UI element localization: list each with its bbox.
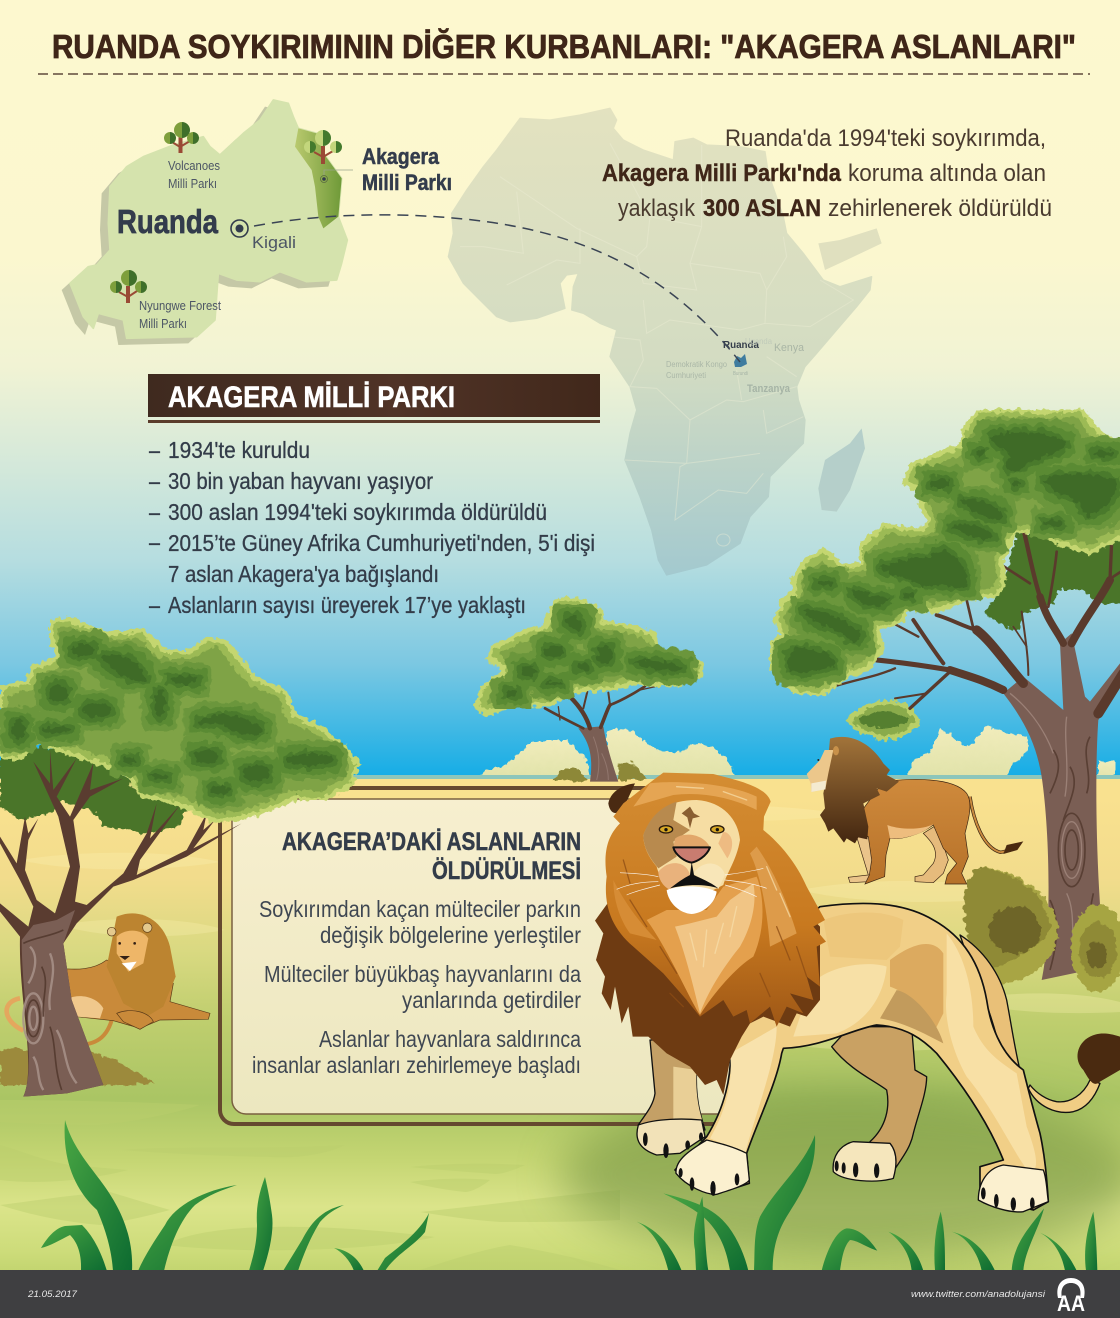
- sky background: [0, 0, 1120, 780]
- left tree trunk and branches: [0, 750, 242, 1097]
- panel body text: [252, 896, 581, 1078]
- panel heading: AKAGERA’DAKİ ASLANLARIN: [282, 828, 581, 856]
- map of Rwanda: Ruanda: [117, 203, 219, 240]
- dark under canopy: [0, 747, 187, 833]
- map of Rwanda: Kigali: [252, 233, 296, 252]
- far front leg: [638, 1040, 705, 1130]
- small bushes by middle tree: [552, 762, 647, 782]
- small foliage patch: [847, 700, 920, 740]
- map of Rwanda: Milli Parkı: [168, 176, 217, 191]
- horizon clouds: [475, 727, 1115, 782]
- chin: [667, 886, 717, 914]
- map of Africa: [448, 108, 882, 575]
- logo: AA: [1057, 1278, 1085, 1316]
- map of Africa labels: Demokratik Kongo: [666, 360, 728, 369]
- map of Africa labels: Uganda: [745, 337, 773, 346]
- park facts list: 7 aslan Akagera'ya bağışlandı: [168, 561, 439, 587]
- body: [675, 903, 1048, 1210]
- whiskers: [617, 868, 767, 897]
- footer bar: www.twitter.com/anadolujansi: [911, 1289, 1046, 1300]
- far hind leg: [832, 1027, 927, 1177]
- orange mane: [605, 773, 826, 1027]
- intro text: [602, 125, 1052, 222]
- map of Africa labels: [666, 337, 805, 395]
- nose: [673, 847, 710, 863]
- nose bridge: [673, 835, 710, 847]
- light mane fur: [647, 877, 762, 1015]
- map of Africa labels: Cumhuriyeti: [666, 371, 706, 380]
- left acacia tree: [0, 617, 360, 1097]
- savanna ground: [0, 775, 1120, 1271]
- main lion foreground: [595, 773, 1120, 1212]
- mouth: [670, 862, 718, 888]
- intro text: yaklaşık: [618, 195, 696, 222]
- park facts list: –: [149, 437, 160, 463]
- info panel: killing of the lions: [220, 788, 745, 1124]
- map of Africa labels: Ruanda: [723, 339, 759, 351]
- big acacia tree right: [770, 408, 1120, 980]
- map of Rwanda: Milli Parkı: [139, 316, 187, 331]
- map of Rwanda: Milli Parkı: [362, 170, 452, 195]
- bushes right: [964, 868, 1120, 992]
- park facts list: [149, 437, 595, 618]
- front paws: [676, 1140, 1048, 1212]
- eyes: [659, 826, 724, 833]
- park facts list: 1934'te kuruldu: [168, 437, 310, 463]
- ground shading streaks: [0, 1100, 620, 1270]
- right tree branches: [832, 532, 1120, 713]
- foreground lion ground shadow: [560, 1090, 1120, 1260]
- panel heading: ÖLDÜRÜLMESİ: [432, 856, 581, 885]
- map of Rwanda: Nyungwe Forest: [139, 298, 221, 313]
- panel heading: [282, 828, 581, 885]
- panel body text: Soykırımdan kaçan mülteciler parkın: [259, 896, 581, 922]
- icon: tree Akagera: [304, 130, 342, 164]
- claws: [643, 1132, 1035, 1211]
- park facts list: –: [149, 529, 160, 555]
- park facts list: 30 bin yaban hayvanı yaşıyor: [168, 468, 433, 494]
- park facts list: –: [149, 468, 160, 494]
- dark under canopy: [983, 533, 1120, 630]
- map of Africa labels: Tanzanya: [747, 383, 791, 395]
- Kigali marker: [231, 220, 248, 237]
- intro text: Akagera Milli Parkı'nda: [602, 160, 842, 187]
- park marker and leader: [320, 170, 353, 182]
- park facts list: –: [149, 592, 160, 618]
- park facts list: –: [149, 499, 160, 525]
- left tree foliage: [0, 617, 360, 823]
- footer bar: [0, 1270, 1120, 1318]
- intro text: 300 ASLAN: [703, 195, 821, 222]
- map of Rwanda: Volcanoes: [168, 158, 220, 173]
- grass blades right: [637, 1135, 1097, 1271]
- dark back mane: [595, 860, 820, 1095]
- intro text: Ruanda'da 1994'teki soykırımda,: [725, 125, 1046, 152]
- map of Rwanda: Akagera: [362, 144, 440, 169]
- second lion standing: [807, 737, 1023, 884]
- intro text: zehirlenerek öldürüldü: [828, 195, 1052, 222]
- footer bar: 21.05.2017: [27, 1289, 78, 1300]
- right tree trunk: [1003, 633, 1120, 980]
- body shading: [890, 944, 943, 1033]
- park facts list: 2015’te Güney Afrika Cumhuriyeti'nden, 5'i dişi: [168, 530, 595, 556]
- small Rwanda marker: [734, 354, 747, 367]
- Akagera park area: [295, 128, 342, 228]
- map of Africa labels: Kenya: [774, 342, 805, 354]
- muzzle: [658, 863, 690, 890]
- right trunk bark: [1050, 737, 1098, 970]
- panel body text: Mülteciler büyükbaş hayvanlarını da: [264, 961, 581, 987]
- dashed route arc: [254, 215, 740, 362]
- middle acacia tree: [473, 597, 703, 782]
- face: [643, 800, 740, 892]
- right tree foliage: [770, 408, 1120, 697]
- grass blades left: [41, 1120, 429, 1271]
- map of Rwanda: [62, 100, 452, 345]
- park facts list: 300 aslan 1994'teki soykırımda öldürüldü: [168, 499, 547, 525]
- lying lion under left tree: [7, 913, 210, 1045]
- panel body text: Aslanlar hayvanlara saldırınca: [319, 1026, 581, 1052]
- bush lower left: [0, 1047, 155, 1086]
- logo: AA: AA: [1057, 1291, 1085, 1316]
- panel body text: insanlar aslanları zehirlemeye başladı: [252, 1052, 581, 1078]
- mane fur strands: [623, 787, 807, 1007]
- intro text: koruma altında olan: [848, 160, 1046, 187]
- icon: tree Volcanoes: [164, 122, 199, 153]
- panel body text: değişik bölgelerine yerleştiler: [320, 922, 581, 948]
- heading banner: Akagera Milli Parki: AKAGERA MİLLİ PARKI: [168, 381, 455, 414]
- heading banner: Akagera Milli Parki: [148, 374, 600, 423]
- park facts list: Aslanların sayısı üreyerek 17’ye yaklaştı: [168, 592, 526, 618]
- map of Africa labels: Burundi: [733, 371, 748, 377]
- icon: tree Nyungwe: [110, 270, 147, 303]
- ear: [608, 783, 635, 813]
- tail: [960, 935, 1120, 1112]
- panel body text: yanlarında getirdiler: [402, 987, 581, 1013]
